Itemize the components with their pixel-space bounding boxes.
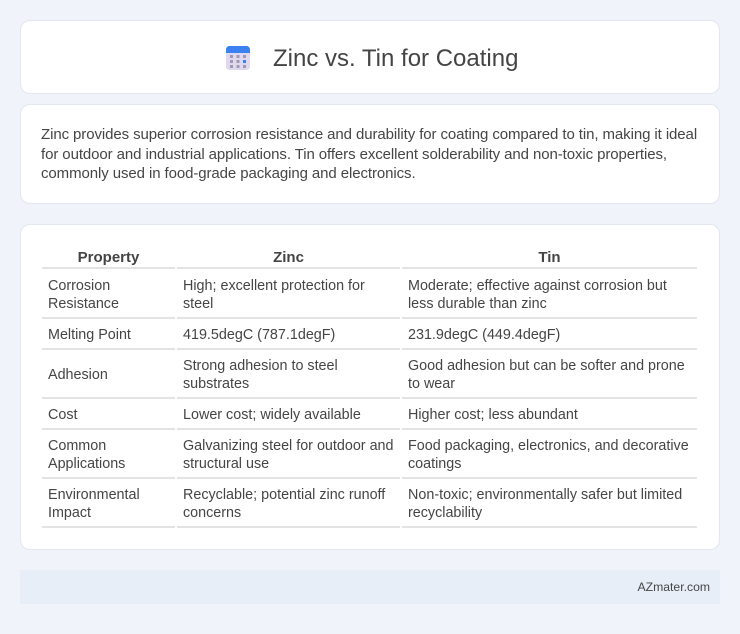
zinc corrosion: [183, 278, 365, 312]
tin corrosion: [408, 278, 667, 312]
row: environmental impact: [48, 487, 140, 521]
zinc applications: [183, 438, 394, 472]
summary text: commonly used in food-grade packaging and electronics.: [41, 165, 416, 182]
summary text: [41, 126, 697, 182]
zinc cost: Lower cost; widely available: [183, 407, 361, 423]
tin environmental: recyclability: [408, 505, 482, 521]
zinc corrosion: High; excellent protection for: [183, 278, 365, 294]
tin applications: coatings: [408, 456, 461, 472]
row: corrosion resistance: [48, 278, 119, 312]
zinc environmental: [183, 487, 386, 521]
title card: [20, 20, 720, 94]
tin melting: 231.9degC (449.4degF): [408, 327, 560, 343]
tin corrosion: Moderate; effective against corrosion but: [408, 278, 667, 294]
header: zinc: Zinc: [273, 249, 304, 266]
row: corrosion resistance: Corrosion: [48, 278, 110, 294]
zinc environmental: concerns: [183, 505, 241, 521]
summary text: for outdoor and industrial applications. Tin offers excellent solderability and non-toxic properties,: [41, 146, 667, 162]
zinc applications: structural use: [183, 456, 269, 472]
tin environmental: [408, 487, 682, 521]
icon: calendar: [226, 46, 250, 70]
row: environmental impact: Impact: [48, 505, 91, 521]
summary text: Zinc provides superior corrosion resistance and durability for coating compared to tin, making it ideal: [41, 126, 697, 143]
header: property: Property: [78, 249, 139, 266]
header: tin: Tin: [538, 249, 561, 266]
row: corrosion resistance: Resistance: [48, 296, 119, 312]
table card: [20, 224, 720, 550]
row: adhesion: Adhesion: [48, 367, 108, 383]
row: melting point: Melting Point: [48, 327, 131, 343]
footer credit: AZmater.com: [638, 580, 710, 594]
tin corrosion: less durable than zinc: [408, 296, 547, 312]
title: Zinc vs. Tin for Coating: [273, 45, 518, 72]
zinc adhesion: Strong adhesion to steel: [183, 358, 338, 374]
zinc melting: 419.5degC (787.1degF): [183, 327, 335, 343]
tin adhesion: Good adhesion but can be softer and prone: [408, 358, 685, 374]
row: common applications: Common: [48, 438, 106, 454]
zinc corrosion: steel: [183, 296, 213, 312]
zinc adhesion: substrates: [183, 376, 249, 392]
tin applications: Food packaging, electronics, and decorative: [408, 438, 689, 454]
row: environmental impact: Environmental: [48, 487, 140, 503]
zinc applications: Galvanizing steel for outdoor and: [183, 438, 394, 454]
row: common applications: [48, 438, 125, 472]
row: cost: Cost: [48, 407, 78, 423]
tin adhesion: [408, 358, 685, 392]
zinc adhesion: [183, 358, 338, 392]
footer bar: [20, 570, 720, 604]
row: common applications: Applications: [48, 456, 125, 472]
tin applications: [408, 438, 689, 472]
summary card: [20, 104, 720, 204]
zinc environmental: Recyclable; potential zinc runoff: [183, 487, 385, 503]
tin cost: Higher cost; less abundant: [408, 407, 578, 423]
tin adhesion: to wear: [408, 376, 455, 392]
tin environmental: Non-toxic; environmentally safer but limited: [408, 487, 682, 503]
